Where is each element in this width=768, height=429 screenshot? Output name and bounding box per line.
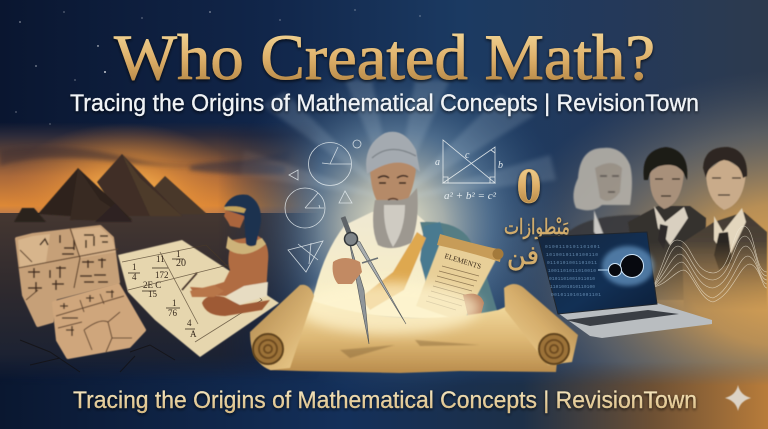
laptop binary readout: 0101101001011010	[549, 276, 595, 282]
papyrus with fractions: 1	[172, 298, 176, 308]
scribe head	[224, 208, 246, 228]
laptop	[538, 232, 712, 338]
papyrus with fractions: 172	[155, 270, 168, 280]
scribe body	[190, 236, 268, 300]
Euclid head and beard	[366, 132, 420, 248]
papyrus with fractions: 20	[176, 258, 186, 269]
pyramids	[14, 154, 207, 222]
laptop binary readout: 0110101001101011	[547, 260, 597, 266]
papyrus with fractions: 1	[176, 249, 180, 259]
papyrus with fractions	[118, 240, 279, 357]
papyrus with fractions: 76	[168, 308, 178, 318]
papyrus with fractions: 4	[132, 272, 137, 282]
portrait: Newton	[567, 146, 640, 235]
laptop binary readout: 1001101011010010	[548, 268, 596, 274]
papyrus with fractions: 15	[148, 289, 158, 299]
laptop binary readout: 1010010110100110	[546, 252, 598, 258]
hand-held Elements scroll: ELEMENTS	[443, 251, 482, 271]
papyrus with fractions: 1	[132, 262, 136, 272]
laptop binary readout	[545, 244, 601, 298]
compass	[333, 217, 406, 344]
hand on compass	[333, 258, 362, 284]
parchment scroll	[250, 282, 578, 373]
panel: Euclid centre scene	[250, 132, 578, 373]
right roll spiral	[539, 334, 569, 364]
mandelbrot fractal	[598, 246, 654, 286]
panel: Euclid centre scene: c	[465, 150, 470, 161]
data wave	[653, 226, 767, 302]
zero numeral: 0	[516, 157, 542, 213]
laptop binary readout: 0010110101001101	[551, 292, 601, 298]
bottom caption: Tracing the Origins of Mathematical Concepts | RevisionTown	[73, 387, 697, 414]
sunset sky and desert ground	[0, 122, 320, 380]
cracked ground lines	[20, 340, 175, 372]
papyrus with fractions: 11	[156, 254, 165, 264]
Arabic text in gold	[504, 215, 570, 271]
panel: modern mathematicians	[568, 147, 767, 310]
clay tablet: cracked	[54, 285, 144, 357]
clay tablet: large	[17, 227, 118, 325]
laptop binary readout: 0100110101101001	[545, 244, 600, 250]
panel: Euclid centre scene: a	[435, 157, 440, 168]
panel: ancient Egypt and Babylon scene	[0, 122, 320, 380]
title: Who Created Math?	[114, 22, 655, 94]
Euclid robe	[308, 210, 500, 322]
laptop binary readout: 1101001010110100	[550, 284, 595, 290]
pythagoras diagram	[443, 140, 495, 183]
left roll spiral	[253, 334, 283, 364]
papyrus with fractions: 2E C	[143, 280, 161, 290]
papyrus with fractions: A	[190, 329, 197, 339]
hand-held Elements scroll	[416, 234, 504, 322]
geometry line drawings	[285, 140, 361, 272]
papyrus with fractions: 4	[187, 318, 192, 328]
panel: Euclid centre scene: b	[498, 160, 503, 171]
portrait: Turing	[682, 147, 767, 310]
portrait: Ramanujan	[628, 147, 706, 300]
panel: Euclid centre scene: a² + b² = c²	[444, 191, 497, 202]
Arabic text in gold: فن	[507, 241, 539, 271]
icon: sparkle	[725, 385, 751, 411]
Arabic text in gold: مَبْطوازات	[504, 215, 570, 239]
subtitle: Tracing the Origins of Mathematical Concepts | RevisionTown	[70, 90, 699, 117]
Egyptian scribe	[182, 194, 270, 316]
scribe kilt and legs	[226, 282, 268, 305]
